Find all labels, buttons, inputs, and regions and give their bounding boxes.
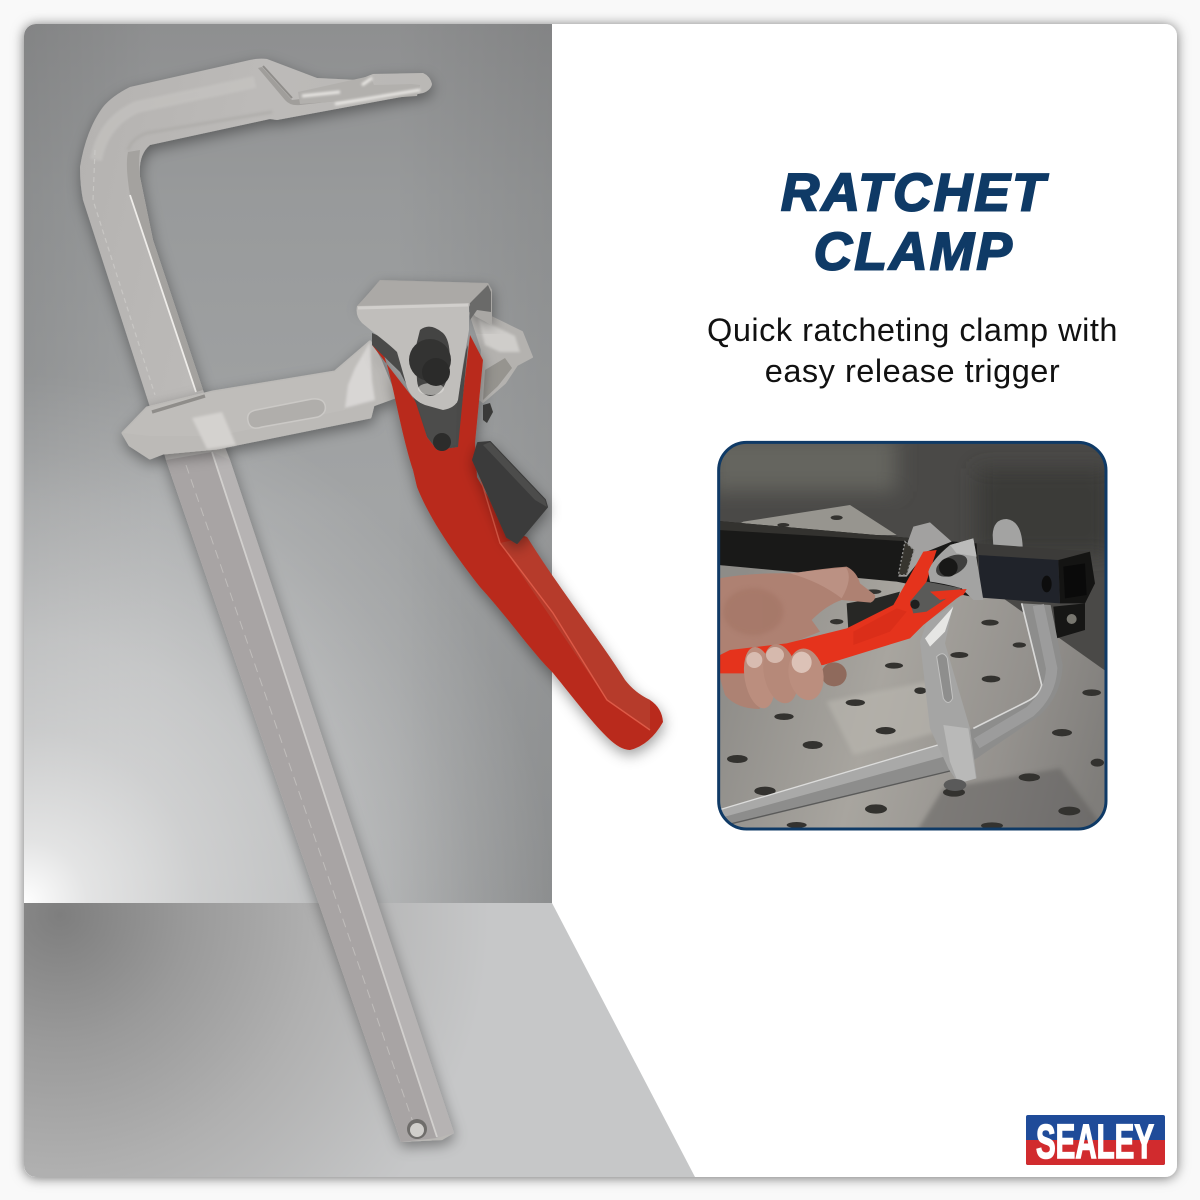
- table: [719, 565, 1107, 832]
- hook slot: [258, 67, 420, 105]
- red handle: [719, 550, 967, 674]
- frame highlights: [96, 82, 255, 160]
- bar end rivet: [407, 1119, 427, 1139]
- bracket: [928, 538, 983, 600]
- hand back: [719, 567, 875, 653]
- description: [707, 312, 1118, 389]
- wall: [24, 24, 552, 903]
- clamp frame and bar: [80, 59, 454, 1142]
- sliding jaw: [123, 342, 395, 458]
- description: easy release trigger: [765, 353, 1060, 389]
- bracket: [357, 280, 492, 325]
- ratchet bar: [898, 522, 952, 577]
- clamp C frame: [719, 603, 1063, 827]
- title: CLAMP: [814, 222, 1014, 282]
- hand fingers: [719, 641, 847, 711]
- clamp frame top: [993, 519, 1023, 547]
- small latch: [483, 403, 493, 423]
- floor: [24, 903, 695, 1177]
- title: RATCHET: [781, 164, 1049, 222]
- ratchet bar: [470, 313, 532, 402]
- black tube: [719, 521, 980, 598]
- red handle: [372, 335, 663, 750]
- sliding jaw: [920, 605, 977, 783]
- table holes: [727, 515, 1104, 829]
- panel: studio backdrop: [24, 24, 695, 1177]
- dark pivot plate: [372, 333, 468, 451]
- black thumb pad: [847, 592, 900, 630]
- bar facets: [166, 452, 437, 1142]
- handle crease: [500, 537, 650, 730]
- background: [720, 444, 1104, 670]
- slot and knob: [409, 327, 451, 396]
- product: ratchet clamp: [80, 59, 663, 1142]
- title: [781, 164, 1049, 282]
- black thumb pad: [473, 442, 547, 543]
- photo: clamp in use: [710, 435, 1110, 832]
- icon: pivot rivet: [433, 433, 451, 451]
- description: Quick ratcheting clamp with: [707, 312, 1118, 348]
